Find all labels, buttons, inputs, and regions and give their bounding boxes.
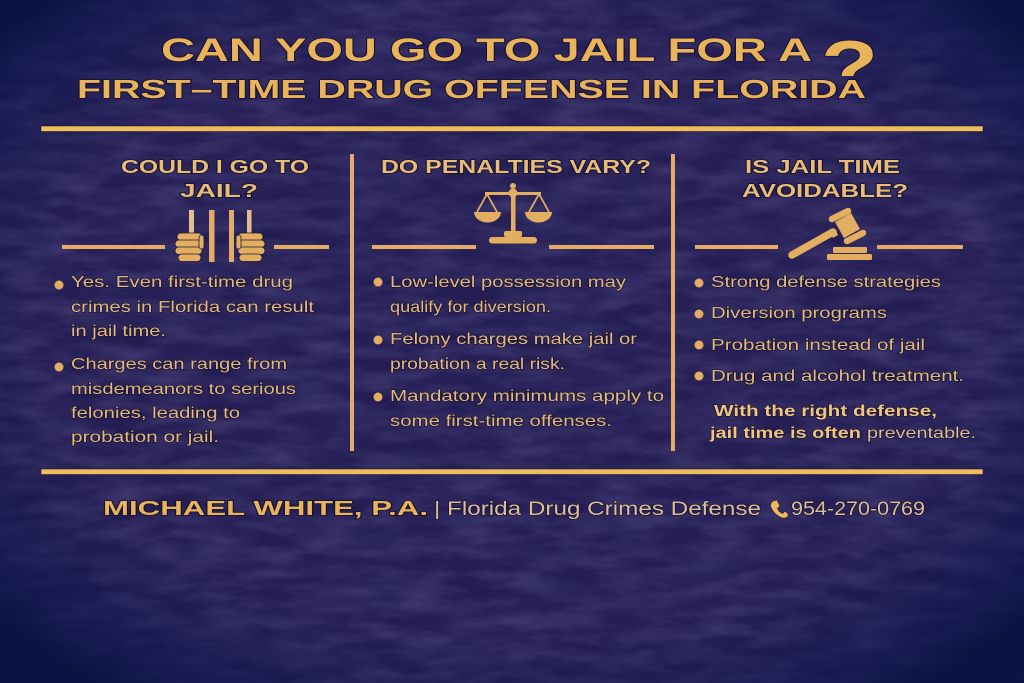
callout: right defense: preventable.	[867, 425, 976, 442]
bullet: low-level	[374, 274, 626, 316]
bullet: diversion: Diversion programs	[711, 305, 887, 322]
bullet: yes	[54, 274, 315, 340]
panel: is jail time avoidable	[694, 157, 976, 442]
bullet: yes: in jail time.	[71, 323, 166, 340]
title	[78, 38, 874, 99]
bottom divider	[41, 469, 983, 474]
callout: right defense	[709, 403, 976, 442]
icon: hands gripping jail bars	[175, 210, 265, 262]
bullet: charges	[54, 356, 296, 446]
bullet: treatment: Drug and alcohol treatment.	[711, 368, 964, 385]
heading rules	[62, 245, 329, 249]
callout: right defense: jail time is often	[709, 425, 861, 442]
icon: scales of justice	[474, 183, 552, 244]
top divider	[41, 126, 983, 132]
title: FIRST–TIME DRUG OFFENSE IN FLORIDA	[77, 74, 866, 104]
heading: could I go to jail: JAIL?	[180, 181, 258, 201]
bullet: felony	[374, 331, 638, 373]
bullet: strong defense: Strong defense strategies	[711, 274, 941, 291]
bullet: mandatory: some first-time offenses.	[390, 413, 612, 430]
tagline: | Florida Drug Crimes Defense	[434, 499, 761, 520]
bullet: charges: Charges can range from	[71, 356, 287, 373]
heading: is jail time avoidable	[742, 157, 908, 201]
bullet: charges: probation or jail.	[71, 429, 219, 446]
bullet: yes: Yes. Even first-time drug	[71, 274, 293, 291]
heading: could I go to jail: COULD I GO TO	[121, 157, 309, 177]
title: CAN YOU GO TO JAIL FOR A	[161, 32, 812, 68]
panel: do penalties vary	[372, 157, 664, 430]
heading: do penalties vary: DO PENALTIES VARY?	[381, 157, 651, 177]
heading: could I go to jail	[121, 157, 309, 201]
heading: is jail time avoidable: AVOIDABLE?	[742, 181, 908, 201]
bullet: charges: felonies, leading to	[71, 405, 240, 422]
footer	[103, 498, 925, 520]
bullet: yes: crimes in Florida can result	[71, 299, 315, 316]
bullet: low-level: qualify for diversion.	[390, 299, 551, 316]
heading: is jail time avoidable: IS JAIL TIME	[745, 157, 900, 177]
icon: gavel	[792, 211, 872, 260]
panel: could I go to jail	[54, 157, 329, 446]
phone number: 954-270-0769	[791, 499, 925, 520]
bullet: low-level: Low-level possession may	[390, 274, 626, 291]
bullet: mandatory	[374, 388, 664, 430]
bullet: charges: misdemeanors to serious	[71, 381, 296, 398]
bullet: mandatory: Mandatory minimums apply to	[390, 388, 664, 405]
big question mark: ?	[821, 25, 878, 107]
callout: right defense: With the right defense,	[714, 403, 937, 420]
firm name: MICHAEL WHITE, P.A.	[103, 498, 428, 520]
bullet: probation: Probation instead of jail	[711, 337, 925, 354]
bullet: felony: Felony charges make jail or	[390, 331, 638, 348]
heading rules	[695, 245, 963, 249]
column dividers	[350, 154, 675, 451]
icon: phone	[770, 500, 788, 518]
heading rules	[372, 245, 654, 249]
bullet: felony: probation a real risk.	[390, 356, 565, 373]
